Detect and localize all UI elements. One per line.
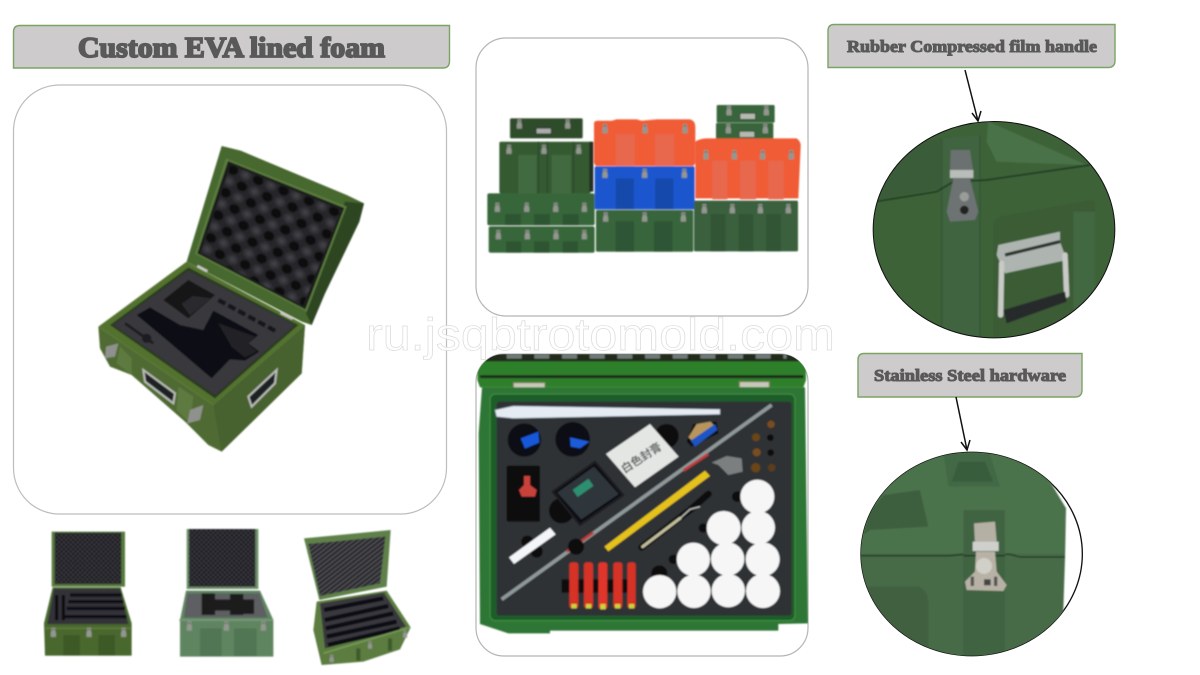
package: white sealant [606, 424, 679, 487]
case photo: rifle foam tray [44, 532, 132, 656]
small green top cases [716, 105, 775, 141]
label: Rubber Compressed film handle: Rubber Compressed film handle [847, 37, 1097, 56]
case body [479, 387, 808, 633]
foam tray [497, 402, 792, 616]
handle recess [993, 200, 1095, 342]
case photo: angled long foam tray [304, 530, 411, 665]
label: Stainless Steel hardware [858, 354, 1082, 397]
case photo: large cavity foam [179, 529, 273, 657]
case lid [187, 146, 364, 325]
panel: main foam-lined case photo [14, 85, 446, 514]
long glass rod [502, 405, 772, 599]
red handled tools [562, 562, 636, 609]
rubber handle [997, 232, 1067, 323]
handles [143, 370, 175, 403]
clear bag [712, 456, 743, 475]
trowel [642, 494, 708, 547]
detail circle: stainless latch [857, 448, 1082, 663]
orange large case [695, 138, 801, 199]
arrow to hardware detail [956, 397, 970, 450]
latches [105, 343, 118, 358]
label: Rubber Compressed film handle [828, 24, 1115, 68]
watermark: ru.jsqbtrotomold.com: ru.jsqbtrotomold.com [366, 309, 835, 360]
heading: Custom EVA lined foam: Custom EVA lined foam [78, 32, 385, 64]
green tall case [499, 142, 593, 193]
lid top surface [857, 448, 1066, 553]
package: white sealant: 白色封膏 [618, 440, 664, 476]
case body [98, 325, 305, 452]
yellow ruler [604, 471, 710, 551]
green small case [510, 118, 583, 138]
green wide case [487, 193, 595, 225]
small drilled holes [751, 421, 775, 472]
white cylinder [509, 528, 584, 564]
green centre case [596, 210, 693, 252]
label: Stainless Steel hardware: Stainless Steel hardware [874, 366, 1066, 385]
photo: stack of green, orange and blue cases [487, 105, 801, 253]
photo: open case with tools [477, 354, 808, 633]
panel: fitted foam tool kit [476, 354, 808, 656]
arrow to handle detail [965, 70, 981, 121]
blue case [595, 166, 695, 209]
bottle recesses [508, 422, 590, 457]
photo: open green case with foam cut-outs [98, 146, 364, 452]
row of three small case photos [44, 529, 411, 665]
foam cut-outs [163, 280, 215, 318]
red cap recess [507, 466, 540, 522]
white round tins [643, 480, 780, 608]
green flat case [489, 226, 595, 253]
heading: Custom EVA lined foam [14, 26, 450, 68]
orange case [594, 119, 695, 166]
panel: stacked coloured cases [476, 38, 808, 316]
case body and lid [861, 486, 1067, 656]
detail circle: handle and latch [870, 118, 1120, 342]
long white tube [495, 406, 720, 418]
package: black sealant [549, 462, 623, 525]
green large case [694, 201, 798, 251]
base rim and foam [98, 262, 305, 405]
case lid shoulder [987, 122, 1087, 165]
stainless latch plate [965, 522, 1007, 591]
stainless latch [947, 150, 978, 222]
blue scraper [687, 422, 718, 447]
case lid edge [477, 354, 806, 389]
